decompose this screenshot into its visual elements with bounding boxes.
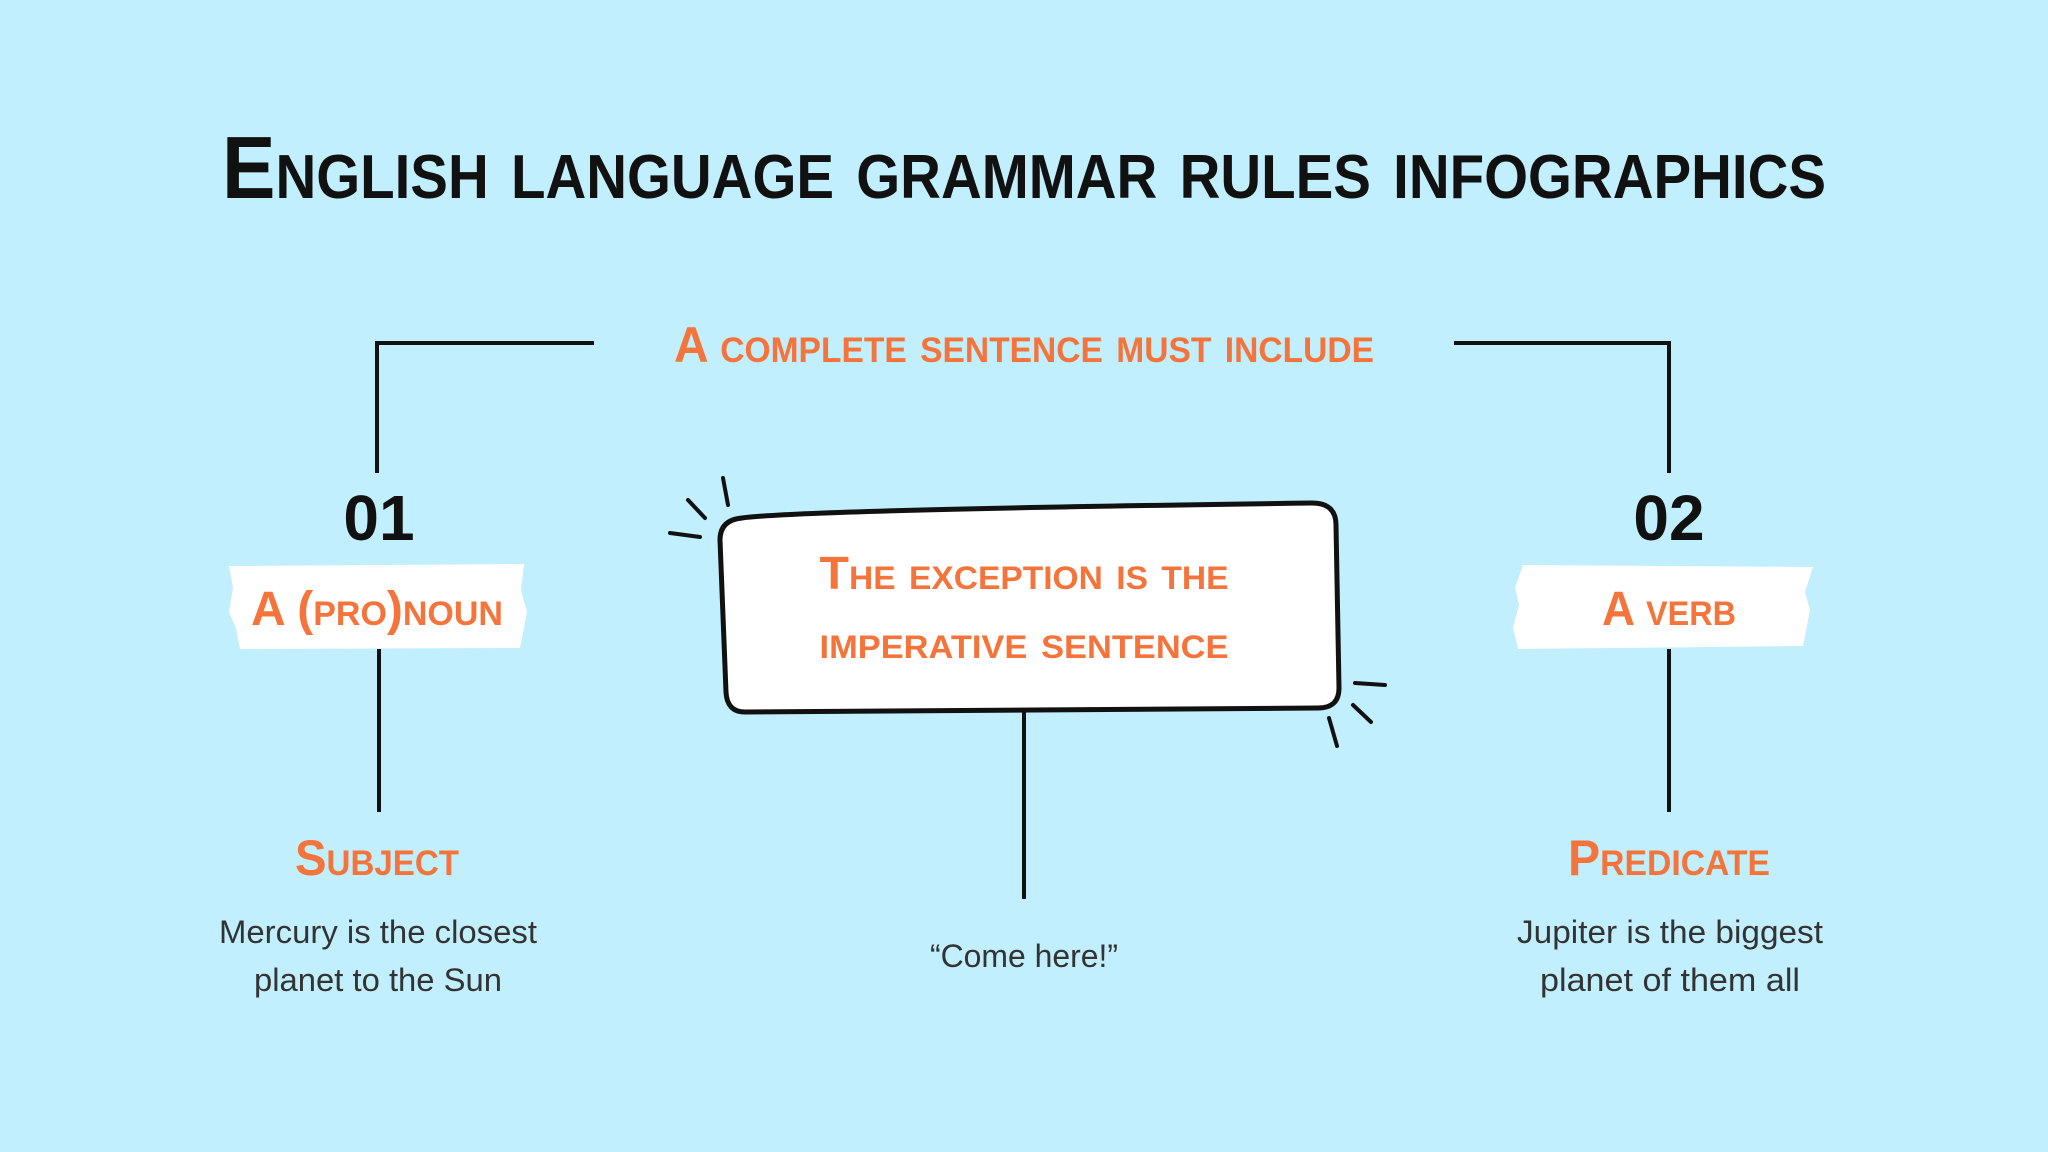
icon: sparks top-left <box>670 478 728 537</box>
center box <box>720 503 1339 712</box>
number 01: 01 <box>343 482 415 554</box>
center box: The exception is the <box>820 547 1228 599</box>
description: planet to the Sun <box>254 962 502 998</box>
panel: right verb <box>1513 482 1823 998</box>
subtitle: A complete sentence must include <box>674 317 1374 373</box>
tape label: A (pro)noun <box>251 583 503 636</box>
bracket right <box>1454 343 1669 473</box>
heading subject: Subject <box>295 830 459 886</box>
tape label <box>229 564 527 649</box>
description: planet of them all <box>1540 962 1800 998</box>
example text: “Come here!” <box>930 938 1118 974</box>
tape label <box>1513 565 1813 649</box>
panel: left pronoun <box>219 482 537 998</box>
description: Jupiter is the biggest <box>1517 914 1823 950</box>
icon: sparks bottom-right <box>1329 683 1385 746</box>
number 02: 02 <box>1633 482 1705 554</box>
tape label: A verb <box>1602 583 1736 636</box>
title: English language grammar rules infographics <box>222 118 1826 217</box>
center box: imperative sentence <box>820 616 1228 668</box>
bracket left <box>377 343 594 473</box>
heading predicate: Predicate <box>1568 830 1770 886</box>
description: Mercury is the closest <box>219 914 537 950</box>
